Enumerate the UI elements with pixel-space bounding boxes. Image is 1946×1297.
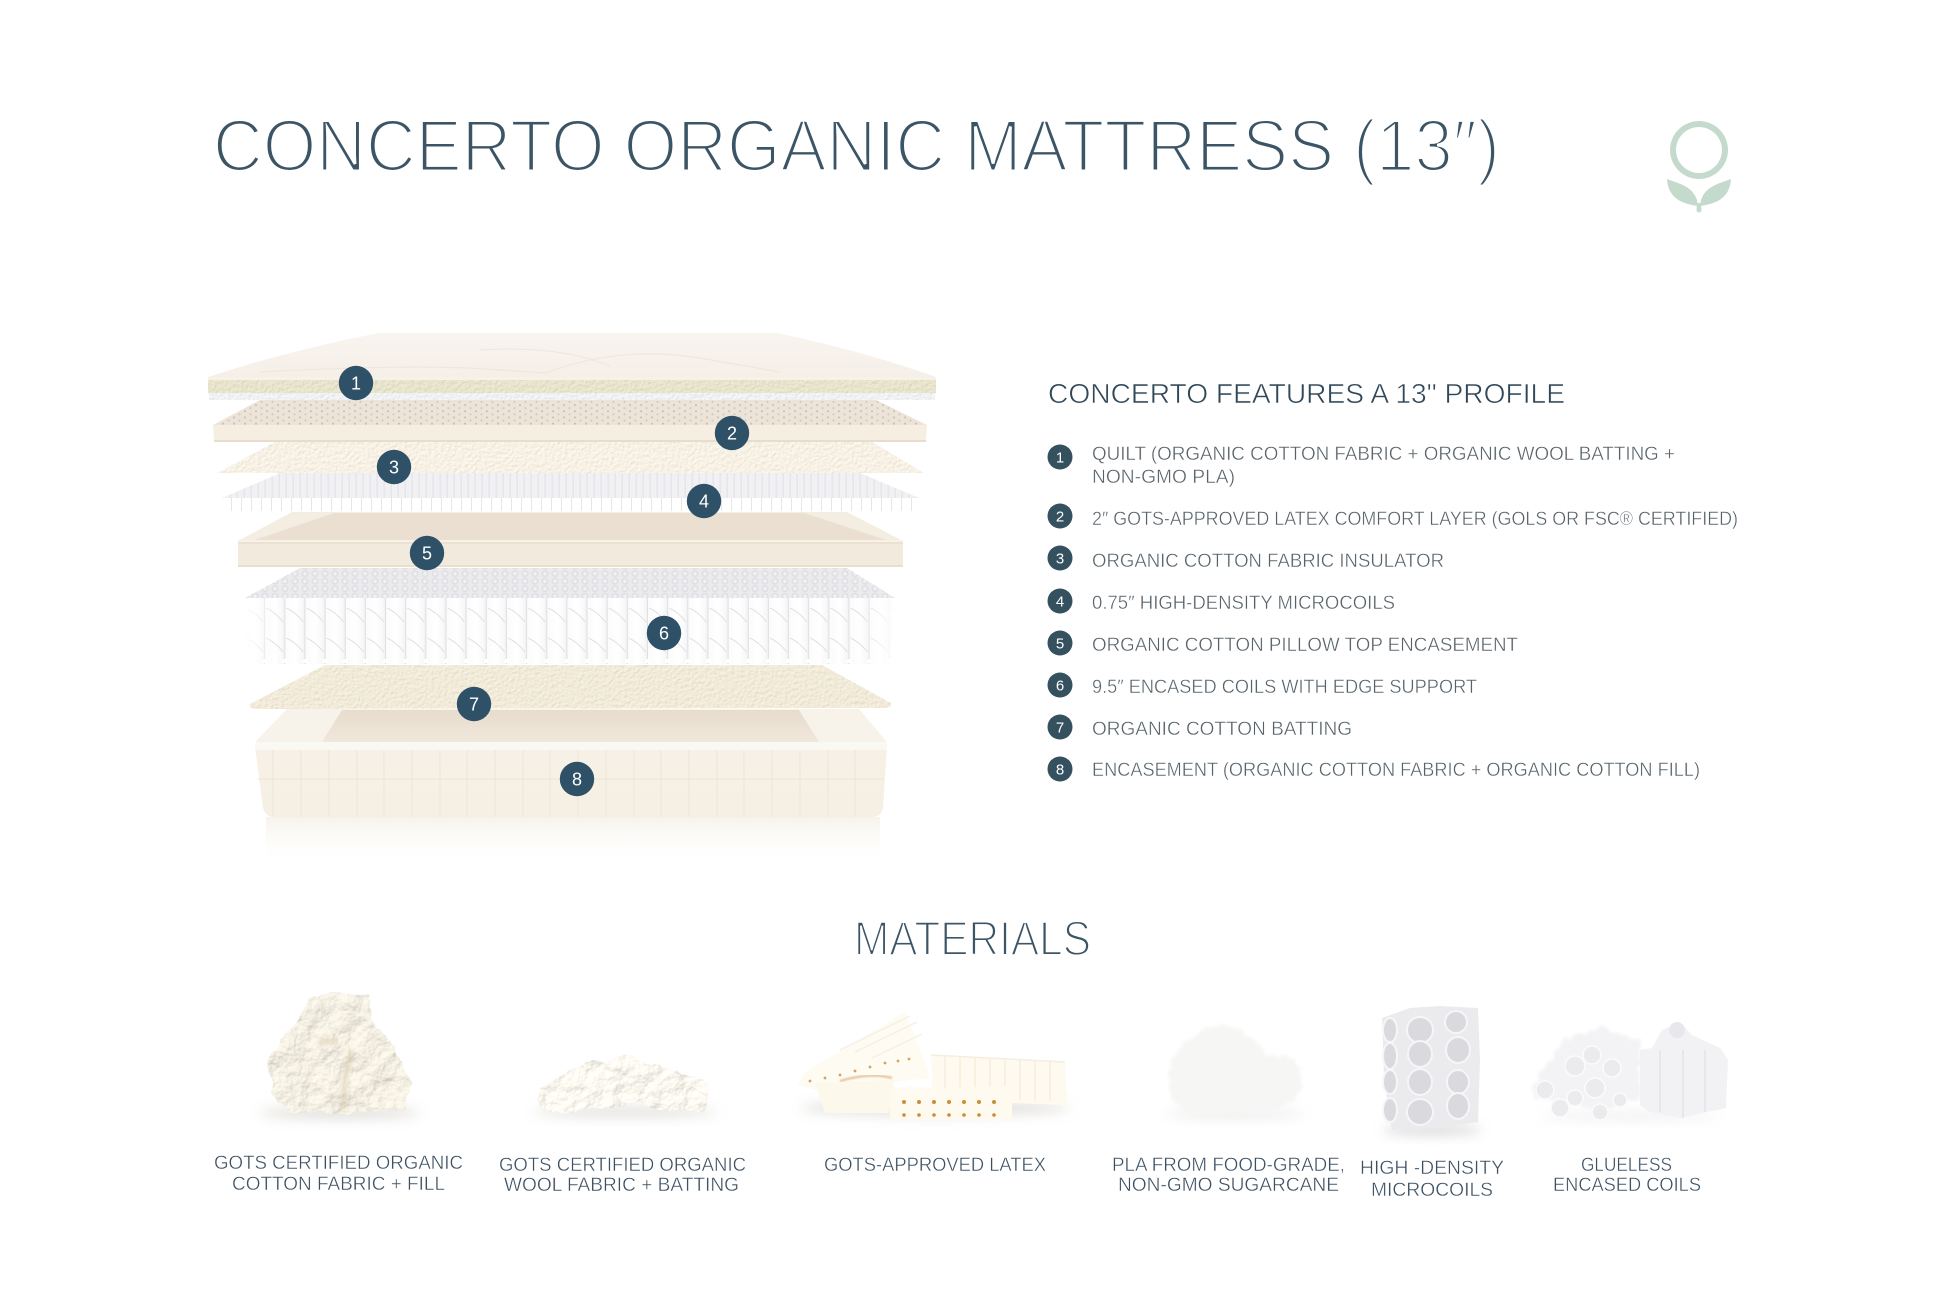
feature 4: 0.75″ HIGH-DENSITY MICROCOILS [1092, 592, 1395, 614]
feature 8: 8 [1056, 762, 1064, 778]
feature 1: 1 [1056, 450, 1064, 466]
label: NON-GMO SUGARCANE [1118, 1174, 1339, 1196]
feature 6: 9.5″ ENCASED COILS WITH EDGE SUPPORT [1092, 676, 1477, 698]
label: MICROCOILS [1371, 1179, 1493, 1201]
material: microcoils [1360, 1006, 1504, 1201]
badge 8 [560, 762, 594, 796]
badge 8: 8 [572, 770, 582, 790]
layer 8: encasement [255, 709, 887, 865]
feature 1: QUILT (ORGANIC COTTON FABRIC + ORGANIC WOOL BATTING + [1092, 443, 1675, 465]
label: GOTS CERTIFIED ORGANIC [214, 1152, 463, 1174]
material: latex [798, 1012, 1070, 1176]
feature 7: 7 [1056, 720, 1064, 736]
label [1112, 1154, 1345, 1196]
features heading: CONCERTO FEATURES A 13" PROFILE [1048, 378, 1565, 409]
material: encased coils [1532, 1022, 1728, 1196]
layer 7: organic cotton batting [250, 665, 891, 709]
mattress badges [339, 366, 749, 796]
badge 4 [687, 484, 721, 518]
label [214, 1152, 463, 1195]
badge 1: 1 [351, 374, 361, 394]
layer 5: pillow top encasement [238, 512, 903, 567]
features list [1048, 443, 1738, 782]
title: CONCERTO ORGANIC MATTRESS (13″) [213, 106, 1500, 187]
feature 3: ORGANIC COTTON FABRIC INSULATOR [1092, 550, 1444, 572]
feature 1: NON-GMO PLA) [1092, 466, 1235, 488]
material: PLA [1112, 1026, 1345, 1196]
badge 6: 6 [659, 624, 669, 644]
materials row [214, 990, 1728, 1201]
badge 7: 7 [469, 694, 479, 714]
layer 4: microcoils [222, 473, 919, 511]
mattress exploded diagram [208, 333, 936, 865]
materials heading: MATERIALS [854, 913, 1091, 966]
label: ENCASED COILS [1553, 1174, 1701, 1196]
badge 1 [339, 366, 373, 400]
layer 3: cotton fabric insulator [217, 442, 924, 473]
icon: cotton flower logo [1667, 121, 1731, 212]
feature 3: 3 [1056, 550, 1064, 568]
badge 2 [715, 416, 749, 450]
label: WOOL FABRIC + BATTING [504, 1174, 739, 1196]
feature 2: 2 [1056, 508, 1064, 526]
label [1553, 1154, 1701, 1196]
label: COTTON FABRIC + FILL [232, 1173, 445, 1195]
feature 6: 6 [1056, 678, 1064, 694]
layer 1: quilt [208, 333, 936, 400]
label: GOTS CERTIFIED ORGANIC [499, 1154, 746, 1176]
feature 2: 2″ GOTS-APPROVED LATEX COMFORT LAYER (GOLS OR FSC® CERTIFIED) [1092, 508, 1738, 530]
badge 5: 5 [422, 544, 432, 564]
feature 5: 5 [1056, 636, 1064, 652]
label [499, 1154, 746, 1196]
label: HIGH -DENSITY [1360, 1157, 1504, 1179]
badge 7 [457, 687, 491, 721]
badge 2: 2 [727, 424, 737, 444]
layer 6: encased coils [245, 568, 895, 664]
badge 3 [377, 450, 411, 484]
label: PLA FROM FOOD-GRADE, [1112, 1154, 1345, 1176]
layer 2: latex comfort layer [213, 400, 927, 442]
badge 6 [647, 616, 681, 650]
material: wool [499, 1056, 746, 1196]
material: cotton [214, 990, 463, 1195]
label: GLUELESS [1581, 1154, 1672, 1176]
badge 4: 4 [699, 492, 709, 512]
feature 1 [1048, 443, 1675, 488]
feature 7: ORGANIC COTTON BATTING [1092, 718, 1352, 740]
feature 4: 4 [1056, 594, 1064, 610]
badge 5 [410, 536, 444, 570]
label [1360, 1157, 1504, 1201]
feature 5: ORGANIC COTTON PILLOW TOP ENCASEMENT [1092, 634, 1518, 656]
badge 3: 3 [389, 458, 399, 478]
feature 8: ENCASEMENT (ORGANIC COTTON FABRIC + ORGANIC COTTON FILL) [1092, 759, 1700, 781]
label: GOTS-APPROVED LATEX [824, 1154, 1046, 1176]
